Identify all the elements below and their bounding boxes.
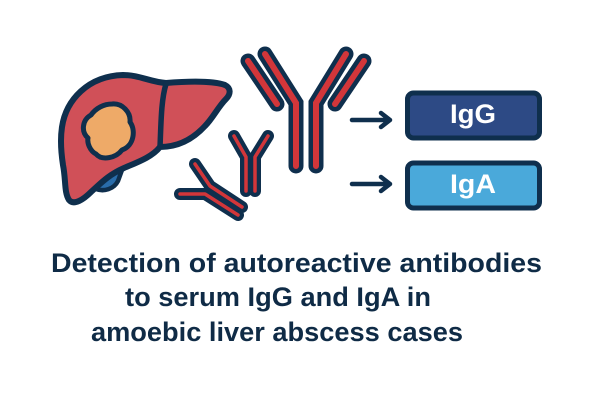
liver lobe divider (160, 84, 166, 147)
liver illustration (61, 75, 230, 202)
small upright antibody (234, 136, 268, 191)
title: Detection of autoreactive antibodies (51, 248, 542, 278)
liver body (61, 75, 230, 202)
abscess (83, 104, 133, 158)
gallbladder (96, 170, 122, 190)
arrow to IgA (352, 177, 390, 191)
IgA box (408, 163, 540, 208)
IgG box (408, 93, 540, 138)
title: to serum IgG and IgA in (125, 282, 431, 312)
title (51, 248, 542, 347)
arrow to IgG (352, 113, 390, 127)
IgA box: IgA (450, 169, 496, 199)
IgG box: IgG (450, 99, 496, 129)
small tilted antibody (180, 164, 242, 215)
large antibody (248, 54, 364, 166)
title: amoebic liver abscess cases (91, 317, 463, 347)
